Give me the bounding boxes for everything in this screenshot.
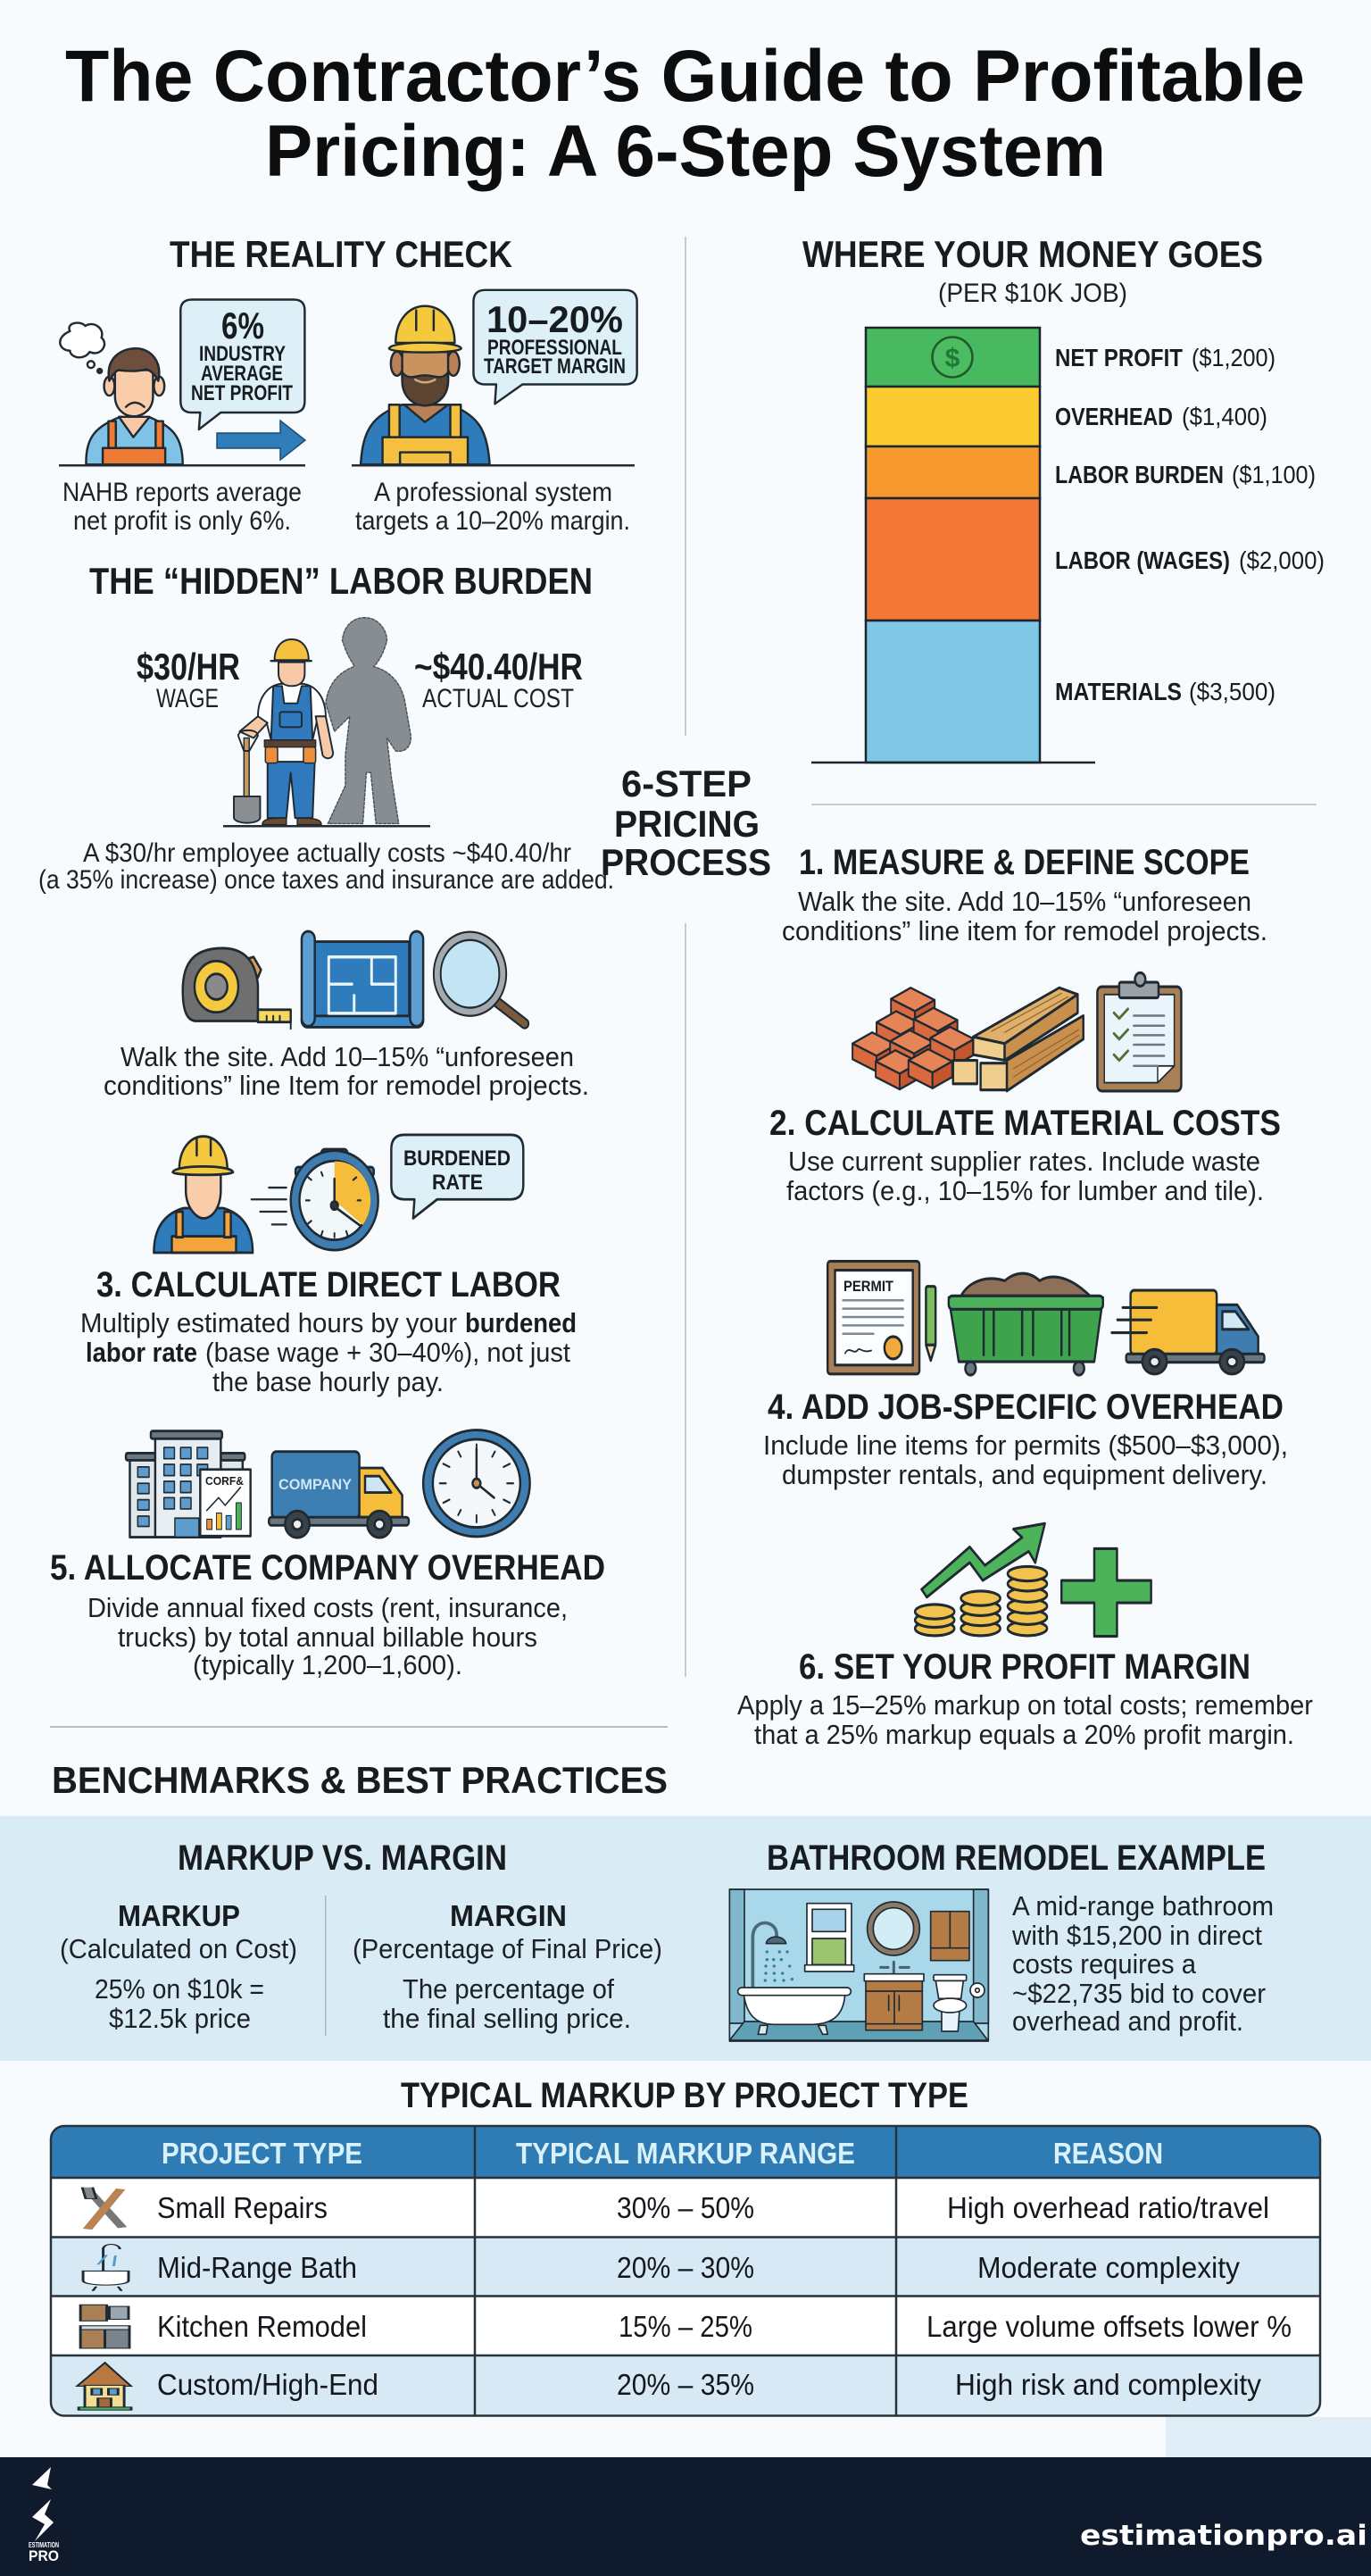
heading: the reality check: THE REALITY CHECK	[170, 233, 512, 275]
markup vs margin: (Calculated on Cost)	[60, 1933, 297, 1964]
chart labels: OVERHEAD	[1055, 403, 1173, 430]
step 5 text: trucks) by total annual billable hours	[118, 1621, 537, 1653]
step 3 text	[80, 1265, 577, 1397]
panel: the reality check: PROFESSIONAL	[487, 336, 622, 360]
table rows: Kitchen Remodel	[157, 2310, 367, 2343]
icon: dollar coin: $	[945, 344, 960, 373]
step 5 text: Divide annual fixed costs (rent, insurance,	[87, 1592, 568, 1623]
logo	[29, 2467, 59, 2564]
subheading: per 10k job: (PER $10K JOB)	[938, 279, 1127, 308]
markup vs margin: MARKUP	[118, 1899, 240, 1932]
icon: tape measure, blueprint, magnifier	[183, 931, 525, 1029]
caption: average net profit: net profit is only 6%.	[73, 506, 291, 536]
arrow	[217, 421, 305, 460]
table header: TYPICAL MARKUP RANGE	[516, 2137, 855, 2170]
markup vs margin: The percentage of	[403, 1973, 614, 2005]
table rows: 30% – 50%	[617, 2191, 754, 2224]
chart labels: ($1,100)	[1232, 461, 1316, 488]
chart labels	[1055, 344, 1325, 705]
step 4 text: dumpster rentals, and equipment delivery.	[782, 1459, 1267, 1490]
table rows	[157, 2191, 1292, 2401]
step 2 text: 2. CALCULATE MATERIAL COSTS	[769, 1104, 1281, 1143]
heading: where your money goes: WHERE YOUR MONEY GOES	[802, 233, 1263, 275]
panel: step 1 text: 1. MEASURE & DEFINE SCOPE	[799, 843, 1250, 882]
chart labels: ($1,400)	[1182, 403, 1267, 430]
panel: the reality check: 10–20%	[486, 298, 623, 340]
chart labels: MATERIALS	[1055, 678, 1182, 705]
caption: target margin: A professional system	[374, 478, 612, 507]
chart labels: LABOR BURDEN	[1055, 461, 1224, 488]
caption: average net profit	[62, 478, 302, 536]
step 2 text: Use current supplier rates. Include waste	[788, 1146, 1260, 1177]
website url: estimationpro.ai	[1080, 2520, 1367, 2552]
icon: office building, company truck, clock	[126, 1430, 530, 1538]
title: The Contractor’s Guide to Profitable	[65, 36, 1305, 117]
bubble label: burdened rate: BURDENED	[403, 1146, 511, 1171]
heading: hidden labor burden: THE “HIDDEN” LABOR BURDEN	[89, 560, 593, 602]
bubble label: burdened rate: RATE	[432, 1171, 483, 1195]
stacked bar chart	[811, 328, 1095, 763]
table rows: 20% – 30%	[617, 2251, 754, 2284]
panel: step 2	[769, 972, 1281, 1206]
icon: professional contractor with speech bubble	[361, 290, 637, 464]
panel: step 4	[763, 1261, 1288, 1490]
caption: labor burden: A $30/hr employee actually costs ~$40.40/hr	[83, 838, 571, 868]
step 1 duplicate text	[104, 1041, 589, 1101]
table rows: Small Repairs	[157, 2191, 328, 2224]
step 1 duplicate text: conditions” line Item for remodel projects.	[104, 1070, 589, 1101]
actual cost stat: ~$40.40/HR	[414, 646, 583, 688]
logo: PRO	[29, 2547, 59, 2564]
panel: hidden labor burden	[38, 560, 614, 895]
icon: bricks, lumber, clipboard	[852, 972, 1181, 1091]
step 4 text: 4. ADD JOB-SPECIFIC OVERHEAD	[768, 1388, 1284, 1427]
table rows: Moderate complexity	[977, 2251, 1240, 2284]
panel: the reality check: 6%	[221, 304, 264, 346]
panel: benchmarks band	[0, 1816, 1371, 2061]
actual cost stat	[414, 646, 583, 713]
icon: permit, pen, dumpster, delivery truck	[827, 1261, 1264, 1375]
step 3 text: the base hourly pay.	[212, 1366, 444, 1397]
table header	[162, 2137, 1163, 2170]
step 2 text	[769, 1104, 1281, 1206]
markup vs margin: 25% on $10k =	[95, 1973, 264, 2005]
chart labels: LABOR (WAGES)	[1055, 546, 1230, 574]
wage stat: $30/HR	[137, 646, 240, 688]
table rows: 20% – 35%	[617, 2368, 754, 2401]
step 5 text: (typically 1,200–1,600).	[193, 1649, 462, 1680]
bathroom example text	[1011, 1890, 1274, 2037]
table rows: High overhead ratio/travel	[947, 2191, 1269, 2224]
table rows: Mid-Range Bath	[157, 2251, 357, 2284]
icon: worried contractor with speech bubble	[60, 299, 304, 464]
table rows: 15% – 25%	[619, 2310, 752, 2343]
wage stat: WAGE	[156, 684, 219, 713]
icon: worker and gray silhouette	[234, 618, 411, 824]
panel: where your money goes	[802, 233, 1325, 763]
panel: the reality check: INDUSTRY	[199, 342, 286, 366]
panel: step 1 icons	[104, 931, 589, 1101]
step 3 text: burdened	[465, 1307, 577, 1338]
step 6 text: that a 25% markup equals a 20% profit margin.	[754, 1719, 1294, 1750]
panel: step 1 text: conditions” line item for remodel projects.	[782, 915, 1267, 946]
panel: the reality check	[59, 233, 637, 536]
markup vs margin	[60, 1838, 662, 2036]
bathroom example text: ~$22,735 bid to cover	[1012, 1978, 1266, 2009]
icon: rising arrow, coins, plus sign	[915, 1523, 1151, 1636]
panel: markup table	[51, 2126, 1320, 2416]
step 3 text: (base wage + 30–40%), not just	[205, 1337, 570, 1368]
step 3 text: 3. CALCULATE DIRECT LABOR	[96, 1265, 561, 1305]
icon: bathroom illustration	[729, 1889, 988, 2041]
building and truck labels	[205, 1475, 353, 1493]
chart labels: ($3,500)	[1189, 678, 1275, 705]
markup vs margin: $12.5k price	[109, 2003, 251, 2034]
panel: the reality check: TARGET MARGIN	[484, 354, 626, 379]
markup vs margin: MARGIN	[450, 1899, 567, 1932]
caption: labor burden: (a 35% increase) once taxes and insurance are added.	[38, 865, 614, 895]
chart labels: ($2,000)	[1239, 546, 1325, 574]
table header: REASON	[1053, 2137, 1163, 2170]
panel: step 1 text: Walk the site. Add 10–15% “unforeseen	[798, 886, 1251, 917]
panel: step 1 text	[782, 843, 1267, 946]
panel: step 5	[50, 1430, 605, 1680]
step 4 text	[763, 1388, 1288, 1490]
table header: PROJECT TYPE	[162, 2137, 362, 2170]
step 4 text: Include line items for permits ($500–$3,000),	[763, 1430, 1288, 1461]
bathroom remodel heading: BATHROOM REMODEL EXAMPLE	[767, 1838, 1266, 1878]
heading: 6-step pricing process: PRICING	[614, 803, 760, 845]
bubble label: burdened rate	[403, 1146, 511, 1195]
panel: step 3	[80, 1135, 577, 1397]
caption: target margin: targets a 10–20% margin.	[355, 506, 630, 536]
step 1 duplicate text: Walk the site. Add 10–15% “unforeseen	[120, 1041, 574, 1072]
markup vs margin: (Percentage of Final Price)	[353, 1933, 662, 1964]
panel: step 6	[737, 1523, 1313, 1750]
chart labels: NET PROFIT	[1055, 344, 1183, 371]
logo: ESTIMATION	[29, 2541, 59, 2549]
chart labels: ($1,200)	[1192, 344, 1275, 371]
title	[65, 36, 1305, 192]
bathroom example text: with $15,200 in direct	[1011, 1920, 1262, 1951]
building and truck labels: COMPANY	[278, 1476, 353, 1493]
caption: labor burden	[38, 838, 614, 895]
step 3 text: Multiply estimated hours by your	[80, 1307, 457, 1338]
table rows: Large volume offsets lower %	[926, 2310, 1292, 2343]
bathroom example text: A mid-range bathroom	[1012, 1890, 1274, 1922]
heading: benchmarks and best practices: BENCHMARKS & BEST PRACTICES	[52, 1759, 668, 1801]
panel: the reality check: NET PROFIT	[191, 381, 293, 405]
panel: the reality check: AVERAGE	[201, 362, 283, 386]
building and truck labels: CORF&	[205, 1475, 244, 1488]
step 2 text: factors (e.g., 10–15% for lumber and tile).	[786, 1175, 1264, 1206]
heading: typical markup by project type: TYPICAL MARKUP BY PROJECT TYPE	[401, 2076, 968, 2115]
title: Pricing: A 6-Step System	[265, 111, 1106, 192]
heading: 6-step pricing process: PROCESS	[601, 841, 771, 883]
table rows: High risk and complexity	[955, 2368, 1261, 2401]
step 3 text: labor rate	[86, 1337, 197, 1368]
icon: worker, stopwatch, burdened rate bubble	[154, 1135, 523, 1253]
markup vs margin: MARKUP VS. MARGIN	[178, 1838, 507, 1878]
step 5 text: 5. ALLOCATE COMPANY OVERHEAD	[50, 1548, 605, 1588]
step 6 text: 6. SET YOUR PROFIT MARGIN	[799, 1647, 1251, 1687]
step 6 text	[737, 1647, 1313, 1750]
heading: 6-step pricing process	[601, 763, 771, 883]
caption: target margin	[355, 478, 630, 536]
markup vs margin: the final selling price.	[383, 2003, 631, 2034]
table rows: Custom/High-End	[157, 2368, 378, 2401]
wage stat	[137, 646, 240, 713]
step 6 text: Apply a 15–25% markup on total costs; remember	[737, 1689, 1313, 1721]
row icons	[77, 2188, 131, 2410]
bathroom example text: overhead and profit.	[1012, 2005, 1243, 2037]
footer	[0, 2457, 1371, 2576]
permit label: PERMIT	[843, 1278, 894, 1295]
heading: 6-step pricing process: 6-STEP	[621, 763, 752, 804]
icon: dollar coin	[932, 338, 973, 377]
caption: average net profit: NAHB reports average	[62, 478, 302, 507]
actual cost stat: ACTUAL COST	[422, 684, 574, 713]
bathroom example text: costs requires a	[1012, 1948, 1197, 1980]
step 5 text	[50, 1548, 605, 1680]
